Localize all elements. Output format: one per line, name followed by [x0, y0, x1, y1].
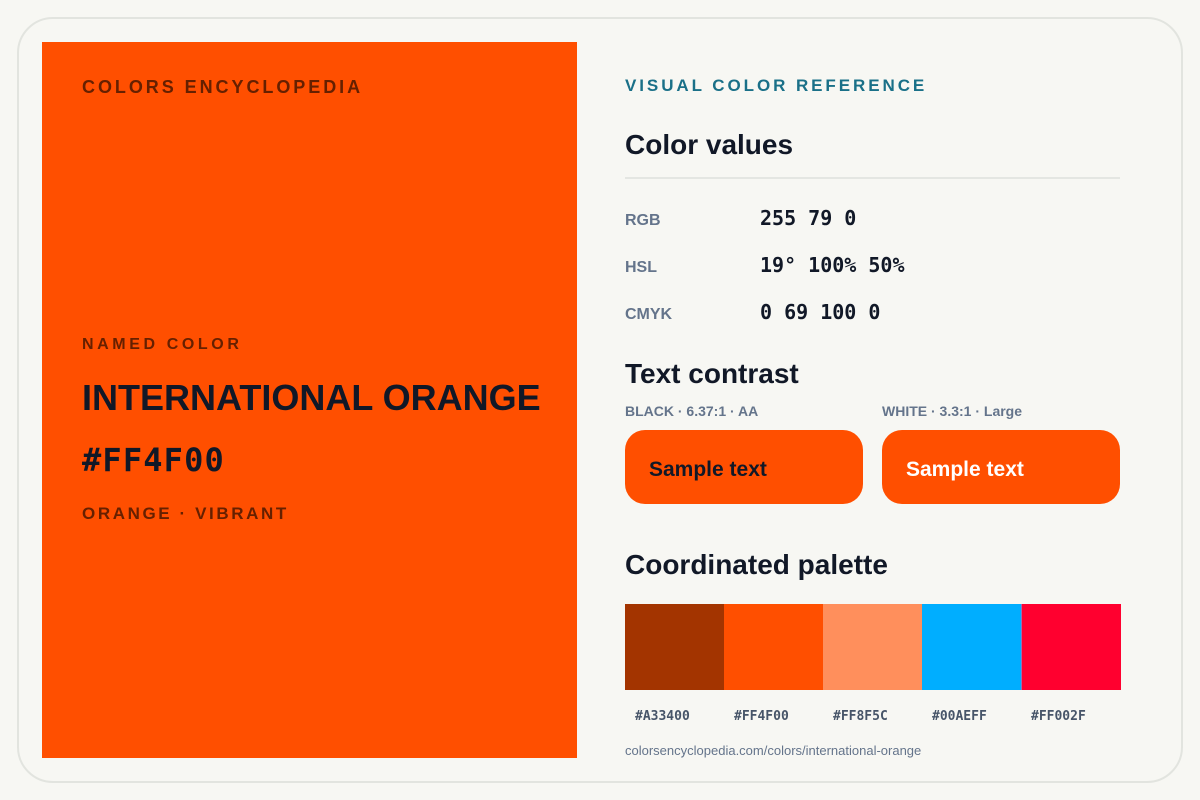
CMYK value: 0 69 100 0	[760, 300, 880, 324]
source url: colorsencyclopedia.com/colors/international-orange	[625, 743, 921, 758]
named color label: NAMED COLOR	[82, 336, 242, 353]
swatch: FF002F	[1021, 604, 1121, 690]
row: RGB	[625, 206, 856, 230]
CMYK label: CMYK	[625, 306, 672, 323]
HSL value: 19° 100% 50%	[760, 253, 904, 277]
heading: text contrast: Text contrast	[625, 358, 799, 389]
section eyebrow: VISUAL COLOR REFERENCE	[625, 76, 927, 95]
swatch: FF8F5C	[823, 604, 922, 690]
swatch: A33400	[625, 604, 724, 690]
hex value: #FF4F00	[82, 441, 225, 479]
heading: coordinated palette: Coordinated palette	[625, 549, 888, 580]
hex label: FF002F: #FF002F	[1031, 709, 1086, 724]
white sample text: Sample text	[906, 458, 1024, 481]
row: HSL	[625, 253, 904, 277]
black sample chip	[625, 430, 863, 504]
family and tone: ORANGE · VIBRANT	[82, 504, 289, 523]
hex label: 00AEFF: #00AEFF	[932, 709, 987, 724]
divider	[625, 177, 1120, 179]
black sample text: Sample text	[649, 458, 767, 481]
black contrast label: BLACK · 6.37:1 · AA	[625, 403, 758, 419]
RGB label: RGB	[625, 212, 661, 229]
white sample chip	[882, 430, 1120, 504]
white contrast label: WHITE · 3.3:1 · Large	[882, 403, 1022, 419]
panel: color swatch	[42, 42, 577, 758]
row: CMYK	[625, 300, 880, 324]
HSL label: HSL	[625, 259, 657, 276]
swatch: FF4F00	[724, 604, 823, 690]
RGB value: 255 79 0	[760, 206, 856, 230]
swatch: 00AEFF	[922, 604, 1021, 690]
heading: color values: Color values	[625, 129, 793, 160]
color name: INTERNATIONAL ORANGE	[82, 377, 541, 418]
hex label: FF4F00: #FF4F00	[734, 709, 789, 724]
hex label: FF8F5C: #FF8F5C	[833, 709, 888, 724]
brand label: COLORS ENCYCLOPEDIA	[82, 77, 363, 97]
hex label: A33400: #A33400	[635, 709, 690, 724]
